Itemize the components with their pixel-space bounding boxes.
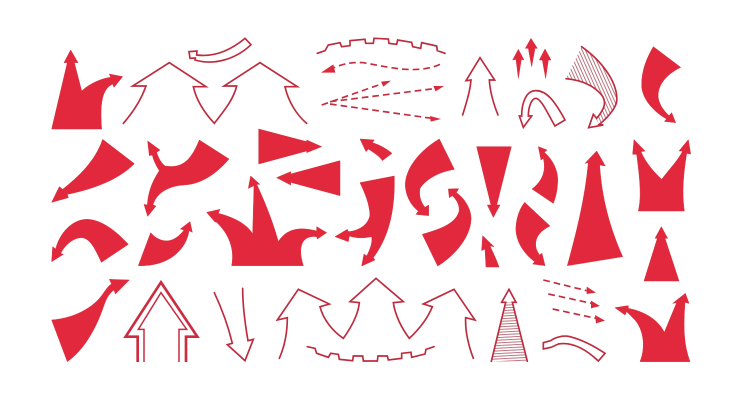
arrow: small curved outline bottom [543,336,605,361]
arrow: tall triangle [567,151,623,266]
arrow: triangle right [259,129,322,164]
bottom-left arrows [52,279,253,362]
arrow: hatched triangle [491,289,527,361]
arrow: solid split [144,140,229,216]
arrow: outlined triple up [277,278,475,358]
stepped arc bottom [307,347,434,361]
arrow: solid swoop up [138,222,192,266]
arrow: solid arch [52,219,128,262]
arrow: hatched curved [566,47,617,128]
arrow: dashed fan up [322,81,391,105]
arrow: outlined narrow up [463,58,498,115]
stepped arc top [317,38,445,53]
arrow: S top [405,139,454,216]
middle-left arrows [52,129,340,266]
arrow: small curved outline [189,38,251,62]
arrow: curved down-right [516,202,550,266]
arrow: dashed left [321,62,440,73]
arrow: outlined u-turn [519,91,565,127]
arrow: two-headed fork [633,140,691,211]
arrow: inverted triangle [477,147,511,217]
bottom-right arrows [277,278,690,362]
arrow: solid curl [642,47,681,123]
top-left arrows [52,38,307,129]
arrow: tiny up [482,236,499,267]
arrow: dashed fan middle [330,86,444,102]
arrow: solid diagonal [52,139,134,202]
arrow: triangle left [277,161,340,196]
arrow: three small up arrows [513,38,551,78]
arrow: solid fork bottom right [615,293,690,362]
top-right arrows [317,38,681,128]
arrow: forked J [335,176,394,266]
arrow: outlined double up arrow [123,63,307,123]
arrow: outlined down [214,288,253,361]
arrow: solid forked arrow [52,50,123,129]
arrow: dashed right middle [548,294,600,308]
arrow: curved up-left [532,147,558,203]
arrow: S bottom [422,189,471,266]
middle-right arrows [335,139,691,281]
arrow: dashed right top [543,280,596,294]
arrow: small triangle up [644,227,679,281]
arrow: solid wave [52,279,129,362]
arrow: double outline house [126,282,197,362]
arrow: small diagonal [360,139,392,161]
arrow: dashed right bottom [553,309,605,323]
arrow: dashed fan down [330,104,441,122]
arrow: three-way crown [207,176,327,266]
